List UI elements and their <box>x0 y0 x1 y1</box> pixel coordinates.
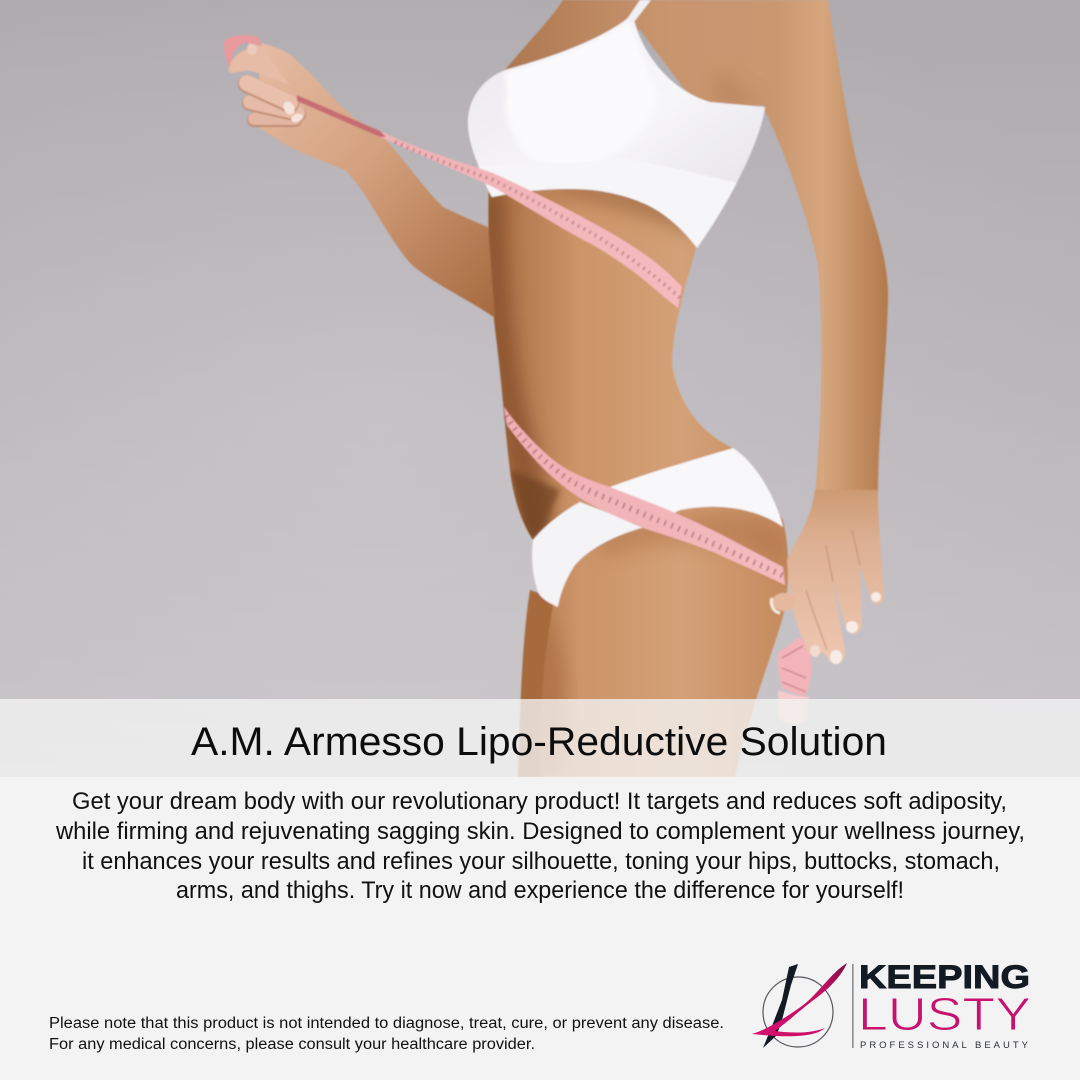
rear leg <box>518 590 560 777</box>
description text: it enhances your results and refines your silhouette, toning your hips, buttocks, stomach, <box>82 848 1000 875</box>
torso and thigh <box>488 165 788 777</box>
bra band <box>490 172 736 248</box>
title: A.M. Armesso Lipo-Reductive Solution <box>191 720 887 764</box>
armpit shadow <box>715 70 762 105</box>
logo wordmark: KEEPING <box>859 959 1030 995</box>
tape: lower section <box>504 407 785 585</box>
upper briefs <box>610 448 783 527</box>
logo mark <box>752 963 847 1048</box>
bra cup <box>506 25 638 141</box>
description text <box>55 788 1025 904</box>
thumb and ring <box>772 593 796 611</box>
description text: while firming and rejuvenating sagging skin. Designed to complement your wellness journey, <box>55 818 1025 845</box>
lower briefs <box>532 502 645 607</box>
logo: Keeping Lusty <box>752 959 1031 1051</box>
logo wordmark <box>858 959 1031 1051</box>
fingers and nails <box>229 43 304 124</box>
torso shading <box>480 175 790 777</box>
title banner <box>0 699 1080 777</box>
description text: Get your dream body with our revolutionary product! It targets and reduces soft adiposity, <box>72 788 1007 815</box>
disclaimer: Please note that this product is not intended to diagnose, treat, cure, or prevent any disease. <box>49 1015 724 1032</box>
description text: arms, and thighs. Try it now and experience the difference for yourself! <box>176 877 904 904</box>
photo background <box>0 0 1080 777</box>
tape: upper section <box>224 35 682 308</box>
disclaimer: For any medical concerns, please consult your healthcare provider. <box>49 1036 535 1053</box>
photo: woman measuring waist with tape <box>224 0 888 777</box>
lower panel <box>0 777 1080 1080</box>
disclaimer <box>49 1015 724 1053</box>
tape coil <box>778 637 812 724</box>
white bra <box>467 18 766 248</box>
logo wordmark: LUSTY <box>858 988 1031 1040</box>
rear arm and shoulder <box>505 0 888 495</box>
front arm and hand <box>252 43 495 318</box>
logo wordmark: PROFESSIONAL BEAUTY <box>860 1040 1030 1051</box>
right hand <box>771 490 884 664</box>
bra strap <box>627 0 651 22</box>
logo divider <box>852 964 854 1048</box>
